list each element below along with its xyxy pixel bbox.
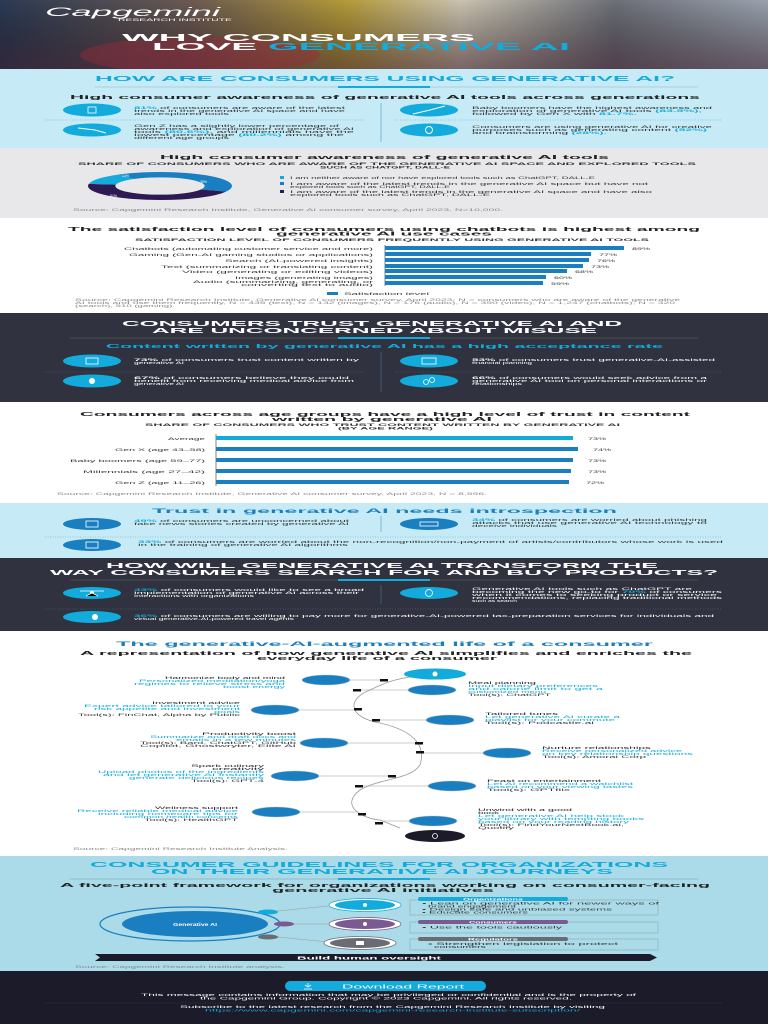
- item: tailored tunes: [380, 712, 623, 725]
- stat: 81% aware: 81% of consumers are aware of the latest: [134, 106, 348, 110]
- panel: awareness donut: SUCH AS CHATGPT, DALL-E: [320, 166, 451, 170]
- stat: creative: and brainstorming (28%) .: [472, 131, 607, 135]
- item: feast on entertainment: Feast on entertainment: [487, 779, 604, 783]
- item: spark culinary creativity: Upload photos of the ingredients: [98, 770, 264, 774]
- legend: I am neither aware of nor have explored tools such as ChatGPT, DALL-E: [290, 176, 596, 180]
- stat: artists: in the training of generative AI algorithms: [138, 543, 348, 547]
- item: nurture relationships: Nurture relationships: [542, 746, 651, 750]
- bar chart: satisfaction: 89%: [632, 247, 651, 251]
- item: unwind with a good book: Tool(s): FindYourNextBook.ai,: [478, 823, 624, 827]
- stat: 70%: when it comes to seeking product or service: [472, 593, 717, 597]
- stat: baby boomers: exploration of generative AI tools (83.5%) ,: [472, 109, 702, 113]
- stat: gen z: lowest percentage (80.2%) among the: [134, 133, 344, 137]
- item: nurture relationships: Tool(s): Amorai Corp: [542, 755, 646, 759]
- stat: phishing: [472, 518, 707, 528]
- item: spark culinary creativity: Spark culinary: [191, 764, 264, 768]
- stat: phishing: 34% of consumers are worried about phishing: [472, 518, 707, 522]
- bar chart: trust by age: 72%: [586, 481, 605, 485]
- section: consumer guidelines: A five-point framework for organizations working on consumer-facing: [60, 883, 710, 889]
- stat: 53% finance: financial planning: [472, 361, 532, 365]
- item: meal planning: Tool(s): ChatGPT: [468, 693, 553, 697]
- stat: 67% medical: generative AI: [134, 382, 184, 386]
- bar chart: satisfaction: Audio (summarizing, generating, or: [193, 280, 375, 284]
- subheading: High consumer awareness of generative AI tools across generations: [70, 95, 700, 101]
- section: augmented life timeline: everyday life of a consumer: [257, 656, 500, 662]
- item: wellness support: common health concerns: [124, 815, 238, 819]
- item: tailored tunes: Let generative AI curate a: [485, 715, 623, 719]
- icon: artist: [63, 539, 121, 551]
- item: productivity boost: Productivity boost: [202, 732, 299, 736]
- item: investment advice: risk appetite and investment: [94, 707, 243, 711]
- item: productivity boost: Copilot, Ghostwryter, Elite AI: [140, 744, 296, 748]
- item: investment advice: Tool(s): FinChat, Alpha by Public: [78, 713, 240, 717]
- arrow: build human oversight: [95, 954, 657, 961]
- stat: 36%: virtual generative-AI-powered travel agents: [134, 617, 294, 621]
- section: search and buy: [0, 558, 768, 631]
- bar chart: satisfaction: 73%: [591, 265, 610, 269]
- icon: trend up: [400, 104, 458, 116]
- box: organizations: [410, 897, 662, 915]
- bar chart: satisfaction: 60%: [554, 276, 573, 280]
- donut chart: 51%: [110, 194, 117, 198]
- item: harmonize body and mind: Personalized meditation/yoga: [139, 679, 288, 683]
- item: spark culinary creativity: creativity: [212, 767, 264, 771]
- stat: 43%: [134, 588, 364, 598]
- stat: 67% medical: 67% of consumers believe they could: [134, 376, 349, 380]
- item: spark culinary creativity: and let generative AI instantly: [103, 773, 264, 777]
- box: regulators: consumers: [434, 945, 486, 949]
- bar chart: satisfaction: Search (AI-powered insights): [225, 259, 375, 263]
- stat: baby boomers: [472, 106, 712, 116]
- source: Source: Capgemini Research Institute, Generative AI consumer survey, April 2023; N = consumers who are aware of the generative: [75, 298, 680, 302]
- icon: people: [63, 104, 121, 116]
- item: meal planning: Meal planning: [468, 681, 536, 685]
- item: spark culinary creativity: [98, 764, 388, 783]
- bar chart: trust by age: [57, 412, 691, 496]
- item: productivity boost: [140, 732, 415, 748]
- box: organizations: brand engagement: [428, 904, 519, 908]
- legend: [327, 292, 429, 296]
- item: harmonize body and mind: regimes to relieve stress and: [134, 682, 285, 686]
- bar chart: trust by age: Gen Z (age 11–26): [115, 481, 207, 485]
- item: nurture relationships: Receive personalized advice: [542, 749, 682, 753]
- panel: awareness donut: SHARE OF CONSUMERS WHO ARE AWARE OF THE GENERATIVE AI SPACE AND EXPLORED TOOLS: [78, 162, 698, 166]
- stat: phishing: attacks that use generative AI technology to: [472, 521, 707, 525]
- stat: creative: Consumers are using generative AI for creative: [472, 125, 712, 129]
- title: LOVE: [152, 42, 258, 53]
- panel: awareness donut: [0, 148, 768, 218]
- icon: medical: [63, 374, 121, 388]
- section: consumers trust generative AI: ARE UNCONCERNED ABOUT MISUSE: [152, 328, 598, 335]
- bar chart: trust by age: written by generative AI: [268, 417, 494, 423]
- stat: 73% trust: [134, 358, 359, 365]
- subscribe: https://www.capgemini.com/capgemini-research-institute-subscription/: [205, 1008, 583, 1012]
- item: meal planning: and calorie limit to get a: [468, 687, 606, 691]
- stat: 43%: 43% of consumers would like to see a broad: [134, 588, 364, 592]
- icon: consumers: [329, 918, 401, 930]
- source: Source: Capgemini Research Institute analysis.: [75, 965, 285, 969]
- item: feast on entertainment: based on your viewing tastes: [487, 785, 633, 789]
- box: organizations: • Design safe and unbiased systems: [422, 908, 612, 912]
- button: download report: Download Report: [342, 984, 466, 990]
- item: feast on entertainment: Tool(s): GPTflix: [487, 788, 570, 792]
- bar chart: satisfaction: [68, 227, 700, 308]
- stat: gen z: Gen Z has a slightly lower percentage of: [134, 124, 342, 128]
- diagram: generative AI hub: Generative AI: [173, 922, 217, 927]
- item: tailored tunes: playlist for your commute: [485, 718, 615, 722]
- section: augmented life timeline: [73, 642, 693, 851]
- button: download report: [285, 981, 486, 991]
- legend: I am aware of the latest trends in the generative AI space and have also: [290, 190, 652, 194]
- stat: fake news: [134, 519, 352, 526]
- stat: 73% trust: 73% of consumers trust content written by: [134, 358, 359, 362]
- disclaimer: This message contains information that may be privileged or confidential and is the property of: [141, 993, 639, 997]
- stat: fake news: fake news stories created by generative AI: [134, 522, 349, 526]
- donut chart: [102, 174, 218, 198]
- item: investment advice: [78, 701, 354, 717]
- bar chart: satisfaction: converting text to audio): [241, 283, 375, 287]
- stat: 70%: [472, 587, 722, 603]
- diagram: generative AI hub: [100, 906, 328, 942]
- stat: baby boomers: Baby boomers have the highest awareness and: [472, 106, 712, 110]
- icon: phishing: [400, 518, 458, 530]
- icon: trend down: [63, 124, 121, 136]
- box: regulators: [410, 937, 658, 950]
- item: nurture relationships: on key relationship questions: [542, 752, 693, 756]
- heading: High consumer awareness of generative AI tools: [160, 155, 609, 161]
- title: [122, 33, 571, 53]
- icon: relationships: [400, 374, 458, 388]
- stat: 53% finance: [472, 358, 715, 365]
- box: consumers: [410, 920, 658, 933]
- icon: shopping: [400, 587, 458, 599]
- item: wellness support: Receive reliable medical advice: [77, 809, 238, 813]
- item: tailored tunes: Tailored tunes: [485, 712, 558, 716]
- bar chart: satisfaction: 77%: [599, 253, 618, 257]
- section: search and buy: WAY CONSUMERS SEARCH FOR AND BUY PRODUCTS?: [50, 570, 718, 577]
- item: wellness support: including homecare tips for: [98, 812, 240, 816]
- stat: creative: purposes such as generating content (52%): [472, 128, 709, 132]
- stat: 43%: implementation of generative AI across their: [134, 591, 361, 595]
- icon: end moon: [405, 830, 465, 842]
- stat: 36%: [134, 614, 714, 621]
- stat: 67% medical: benefit from receiving medical advice from: [134, 379, 354, 383]
- section: consumer guidelines: generative AI initiatives: [272, 888, 494, 894]
- section: consumers trust generative AI: [0, 313, 768, 402]
- bar chart: satisfaction: Gaming (Gen-AI gaming studios or applications): [129, 253, 375, 257]
- stat: artists: 33% of consumers are worried about the non-recognition/non-payment of artists/contributors whose work is used: [138, 540, 723, 544]
- bar chart: trust by age: 73%: [588, 459, 607, 463]
- stat: 36%: 36% of consumers are willing to pay more for generative-AI-powered tax-preparation services for individuals and: [134, 614, 714, 618]
- icon: document: [63, 354, 121, 368]
- heading: CONSUMER GUIDELINES FOR ORGANIZATIONS: [90, 862, 669, 869]
- item: spark culinary creativity: generate delicious recipes: [129, 776, 264, 780]
- item: meal planning: Input dietary preferences: [468, 684, 598, 688]
- bar chart: trust by age: Millennials (age 27–42): [83, 470, 207, 474]
- logo: RESEARCH INSTITUTE: [118, 18, 234, 22]
- bar chart: trust by age: Gen X (age 43–58): [115, 448, 207, 452]
- bar chart: satisfaction: Video (generating or editing videos): [182, 270, 375, 274]
- stat: 73% trust: generative AI: [134, 361, 184, 365]
- item: unwind with a good book: based on your reading history: [478, 820, 629, 824]
- stat: 81% aware: trends in the generative AI space and have: [134, 109, 345, 113]
- item: harmonize body and mind: [134, 675, 380, 689]
- item: investment advice: goals: [214, 710, 240, 714]
- box: organizations: • Educate consumers: [422, 910, 528, 914]
- heading: HOW WILL GENERATIVE AI TRANSFORM THE: [106, 563, 659, 570]
- item: unwind with a good book: [383, 808, 644, 830]
- subheading: Content written by generative AI has a high acceptance rate: [106, 344, 663, 350]
- heading: Consumers across age groups have a high level of trust in content: [80, 412, 691, 418]
- item: investment advice: Expert advice tailored to your: [84, 704, 242, 708]
- box: regulators: • Strengthen legislation to protect: [428, 942, 621, 946]
- stat: 81% aware: [134, 106, 348, 116]
- icon: finance: [400, 354, 458, 368]
- donut chart: 35%: [200, 180, 207, 184]
- source: Source: Capgemini Research Institute Analysis.: [73, 847, 288, 851]
- stat: gen z: [134, 124, 354, 140]
- item: productivity boost: Tool(s): Bard, ChatGPT, GitHub: [140, 741, 296, 745]
- logo: Capgemini: [45, 5, 221, 19]
- bar chart: satisfaction: Text (summarizing or translating content): [161, 265, 375, 269]
- heading: HOW ARE CONSUMERS USING GENERATIVE AI?: [95, 76, 675, 83]
- footer: [0, 971, 768, 1024]
- stat: gen z: different age groups: [134, 136, 229, 140]
- item: investment advice: Investment advice: [152, 701, 240, 705]
- heading: Trust in generative AI needs introspection: [152, 509, 618, 515]
- bar chart: trust by age: Baby boomers (age 59–77): [70, 459, 207, 463]
- bar chart: satisfaction: SATISFACTION LEVEL OF CONSUMERS FREQUENTLY USING GENERATIVE AI TOOLS: [135, 238, 650, 242]
- bar chart: trust by age: 74%: [593, 448, 612, 452]
- stat: 70%: such as search: [472, 599, 517, 603]
- stat: gen z: tools (80.6%) , and millennials have the: [134, 130, 354, 134]
- stat: gen z: awareness and exploration of generative AI: [134, 127, 354, 131]
- legend: I am aware of the latest trends in the generative AI space but have not: [290, 182, 651, 186]
- title: WHY CONSUMERS: [122, 33, 476, 44]
- bar chart: trust by age: SHARE OF CONSUMERS WHO TRUST CONTENT WRITTEN BY GENERATIVE AI: [145, 423, 620, 427]
- header banner: [0, 0, 768, 73]
- source: Source: Capgemini Research Institute, Generative AI consumer survey, April 2023, N=10,000.: [73, 208, 503, 212]
- donut chart: 14%: [122, 174, 129, 178]
- stat: 66% relationships: relationships: [472, 382, 522, 386]
- logo: [45, 5, 234, 22]
- bar chart: satisfaction: generative AI use cases: [276, 232, 492, 238]
- item: wellness support: Tool(s): HealthGPT: [144, 818, 240, 822]
- source: [75, 298, 680, 308]
- item: wellness support: Wellness support: [155, 806, 241, 810]
- icon: gear brain: [400, 124, 458, 136]
- box: consumers: Consumers: [469, 920, 517, 924]
- item: unwind with a good book: Quotify: [478, 826, 514, 830]
- stat: 67% medical: [134, 376, 354, 386]
- source: AI tools and use them frequently, N = 435 (text), N = 132 (images), N = 176 (audio), N = 390 (video), N = 1,247 (chatbots), N = 320: [75, 301, 675, 305]
- timeline path: [352, 674, 430, 828]
- stat: 70%: Generative AI tools such as ChatGPT are: [472, 587, 692, 591]
- stat: fake news: 49% of consumers are unconcerned about: [134, 519, 352, 523]
- subscribe: [180, 1005, 605, 1012]
- icon: regulators: [324, 936, 396, 950]
- heading: The satisfaction level of consumers using chatbots is highest among: [68, 227, 700, 233]
- item: feast on entertainment: [363, 779, 636, 792]
- stat: baby boomers: followed by Gen X with 81.7% .: [472, 112, 637, 116]
- bar chart: trust by age: Average: [168, 437, 205, 441]
- legend: [280, 176, 652, 197]
- section: augmented life timeline: A representation of how generative AI simplifies and enriches the: [80, 651, 692, 657]
- item: unwind with a good book: book: [478, 811, 499, 815]
- stat: 66% relationships: [472, 376, 710, 386]
- item: spark culinary creativity: Tool(s): GPT-4: [191, 779, 264, 783]
- box: organizations: Organizations: [463, 898, 523, 902]
- section: how are consumers using: [0, 69, 768, 148]
- box: regulators: Regulators: [468, 938, 518, 942]
- item: tailored tunes: Tool(s): Podcastle.ai: [485, 721, 594, 725]
- stat: 70%: becoming the new go-to for 70% of consumers: [472, 590, 722, 594]
- icon: start: [404, 668, 466, 680]
- icon: network: [63, 587, 121, 599]
- icon: travel: [63, 611, 121, 623]
- bar chart: trust by age: 73%: [588, 470, 607, 474]
- bar chart: trust by age: 73%: [588, 437, 607, 441]
- legend: explored tools such as ChatGPT, DALL-E: [290, 193, 491, 197]
- bar chart: satisfaction: 59%: [551, 282, 570, 286]
- item: unwind with a good book: Let generative AI help stock: [478, 814, 624, 818]
- item: harmonize body and mind: boost energy: [223, 685, 285, 689]
- item: wellness support: [77, 806, 358, 822]
- stat: creative: [472, 125, 712, 135]
- box: consumers: • Use the tools cautiously: [422, 926, 562, 930]
- subscribe: Subscribe to the latest research from the Capgemini Research Institute by visiting: [180, 1005, 605, 1009]
- icon: news: [63, 518, 121, 530]
- box: organizations: • Lean on generative AI for newer ways of: [422, 902, 662, 906]
- title: GENERATIVE AI: [268, 42, 571, 53]
- section: consumer guidelines: ON THEIR GENERATIVE AI JOURNEYS: [151, 869, 614, 876]
- item: unwind with a good book: Unwind with a good: [478, 808, 572, 812]
- bar chart: satisfaction: Images (generating images): [235, 276, 375, 280]
- bar chart: satisfaction: 68%: [575, 270, 594, 274]
- item: unwind with a good book: your library with tempting books: [478, 817, 644, 821]
- bar chart: satisfaction: 76%: [597, 259, 616, 263]
- item: productivity boost: emails in a few minutes: [176, 738, 296, 742]
- heading: The generative-AI-augmented life of a consumer: [116, 642, 656, 648]
- disclaimer: the Capgemini Group. Copyright © 2023 Capgemini. All rights reserved.: [200, 996, 572, 1000]
- item: productivity boost: Summarize and draft docs and: [150, 735, 296, 739]
- heading: CONSUMERS TRUST GENERATIVE AI AND: [122, 321, 622, 328]
- legend: explored tools such as ChatGPT, DALL-E: [290, 185, 451, 189]
- icon: organizations: [329, 898, 401, 912]
- item: nurture relationships: [424, 746, 693, 759]
- source: Source: Capgemini Research Institute, Generative AI consumer survey, April 2023, N = 8,596.: [57, 492, 487, 496]
- bar chart: trust by age: (BY AGE RANGE): [338, 426, 435, 430]
- item: feast on entertainment: Let AI recommend a watchlist: [487, 782, 636, 786]
- item: harmonize body and mind: Harmonize body and mind: [165, 676, 285, 680]
- section: trust needs introspection: [0, 503, 768, 558]
- bar chart: satisfaction: Chatbots (automating customer service and more): [124, 247, 375, 251]
- legend: Satisfaction level: [344, 292, 429, 296]
- stat: phishing: deceive individuals: [472, 524, 557, 528]
- stat: 66% relationships: generative AI tool on personal interactions or: [472, 379, 709, 383]
- stat: 66% relationships: 66% of consumers would seek advice from a: [472, 376, 710, 380]
- section: consumer guidelines: [0, 856, 768, 971]
- stat: 70%: recommendations, replacing traditional methods: [472, 596, 722, 600]
- stat: 53% finance: 53% of consumers trust generative-AI-assisted: [472, 358, 715, 362]
- source: (search), 510 (gaming).: [75, 304, 175, 308]
- stat: artists: [138, 540, 723, 547]
- stat: 43%: interactions with organizations: [134, 594, 254, 598]
- stat: 81% aware: also explored tools: [134, 112, 229, 116]
- disclaimer: [141, 993, 639, 1000]
- item: meal planning: customized menu: [468, 690, 546, 694]
- arrow: build human oversight: Build human oversight: [297, 956, 442, 960]
- item: meal planning: [361, 681, 606, 697]
